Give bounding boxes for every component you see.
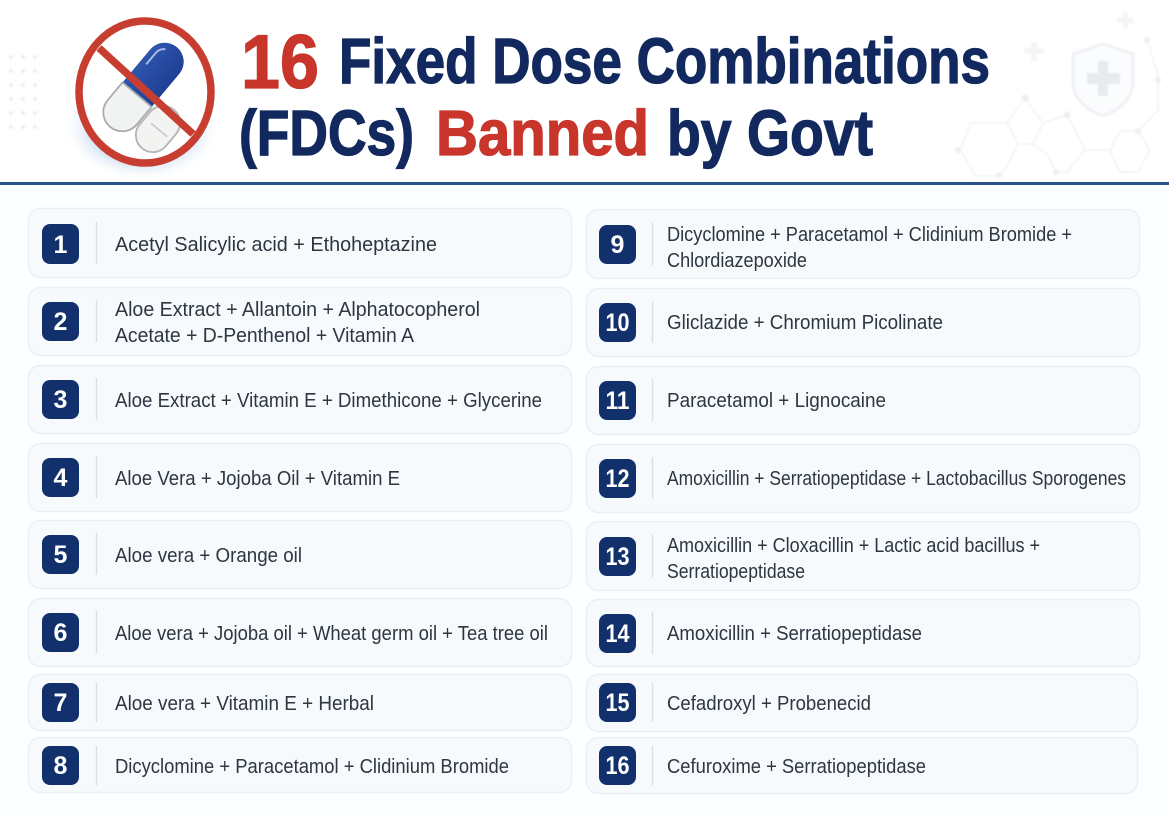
item 13: Serratiopeptidase: [667, 561, 805, 583]
item 6: 6: [54, 619, 67, 647]
item 13: Amoxicillin + Cloxacillin + Lactic acid bacillus +: [667, 535, 1040, 557]
item 10: 10: [606, 309, 630, 337]
item 5: Aloe vera + Orange oil: [115, 545, 302, 567]
title: by Govt: [667, 97, 873, 169]
item 10: [586, 288, 1140, 356]
title: Banned: [436, 97, 649, 169]
item 7: Aloe vera + Vitamin E + Herbal: [115, 693, 374, 715]
item 15: Cefadroxyl + Probenecid: [667, 693, 871, 715]
item 9: Chlordiazepoxide: [667, 250, 807, 272]
item 1: Acetyl Salicylic acid + Ethoheptazine: [115, 234, 437, 256]
item 13: [586, 522, 1140, 590]
item 4: [28, 444, 572, 512]
item 9: Dicyclomine + Paracetamol + Clidinium Bromide +: [667, 224, 1072, 246]
item 2: Aloe Extract + Allantoin + Alphatocopherol: [115, 299, 480, 321]
item 3: Aloe Extract + Vitamin E + Dimethicone + Glycerine: [115, 390, 542, 412]
item 4: 4: [54, 464, 68, 492]
item 8: [28, 738, 572, 792]
item 4: Aloe Vera + Jojoba Oil + Vitamin E: [115, 468, 400, 490]
item 5: 5: [54, 541, 68, 569]
item 3: [28, 366, 572, 434]
title: 16: [241, 20, 319, 105]
item 16: Cefuroxime + Serratiopeptidase: [667, 756, 926, 778]
icon: shield with cross: [1073, 44, 1133, 116]
item 11: 11: [606, 387, 630, 415]
item 16: 16: [606, 752, 630, 780]
item 8: 8: [54, 752, 68, 780]
item 7: 7: [54, 689, 67, 717]
icon: banned pills: [74, 17, 215, 174]
item 6: Aloe vera + Jojoba oil + Wheat germ oil + Tea tree oil: [115, 623, 548, 645]
decorative dot grid: [9, 55, 37, 129]
item 12: 12: [606, 465, 630, 493]
item 6: [28, 598, 572, 666]
item 3: 3: [54, 386, 67, 414]
item 15: [586, 674, 1138, 732]
item 16: [586, 738, 1138, 794]
item 5: [28, 520, 572, 588]
item 13: 13: [606, 543, 630, 571]
item 2: 2: [54, 308, 67, 336]
item 8: Dicyclomine + Paracetamol + Clidinium Bromide: [115, 756, 509, 778]
item 14: 14: [606, 620, 630, 648]
title: Fixed Dose Combinations: [339, 25, 990, 97]
item 14: Amoxicillin + Serratiopeptidase: [667, 623, 922, 645]
header rule: [0, 182, 1169, 185]
item 15: 15: [606, 689, 630, 717]
item 2: Acetate + D-Penthenol + Vitamin A: [115, 325, 415, 347]
item 2: [28, 288, 572, 356]
item 12: [586, 444, 1140, 512]
item 11: Paracetamol + Lignocaine: [667, 390, 886, 412]
item 7: [28, 674, 572, 730]
title: [239, 20, 990, 169]
item 1: [28, 208, 572, 278]
title: (FDCs): [239, 97, 414, 169]
item 1: 1: [54, 231, 68, 259]
item 11: [586, 366, 1140, 434]
background: molecule network and shield: [955, 12, 1161, 178]
item 9: [586, 210, 1140, 278]
item 9: 9: [611, 231, 624, 259]
item 14: [586, 600, 1140, 666]
item 10: Gliclazide + Chromium Picolinate: [667, 312, 943, 334]
